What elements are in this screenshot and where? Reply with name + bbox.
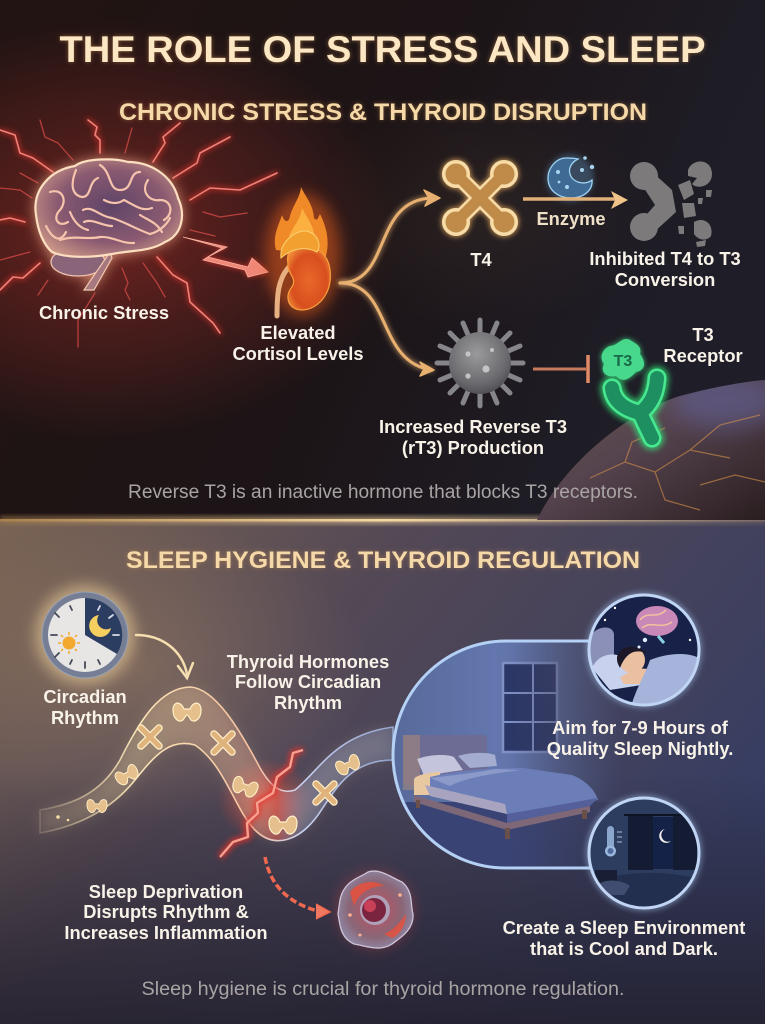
label: aim for 7-9 hours: Aim for 7-9 Hours of xyxy=(552,717,729,738)
label: create a sleep environment: that is Cool and Dark. xyxy=(530,938,718,959)
label: increased reverse T3 production: (rT3) Production xyxy=(402,437,544,458)
icon: circadian clock xyxy=(35,585,135,685)
label: sleep deprivation: Sleep Deprivation xyxy=(89,881,243,902)
arrows: cortisol branching to T4 and rT3 xyxy=(340,190,440,376)
icon: reverse T3 particle xyxy=(437,320,523,406)
label: enzyme: Enzyme xyxy=(536,208,606,229)
panel: chronic stress background xyxy=(0,0,765,520)
label: aim for 7-9 hours: Quality Sleep Nightly. xyxy=(547,738,733,759)
chart: circadian hormone wave ribbon xyxy=(40,687,393,842)
label: T3 receptor xyxy=(663,324,743,366)
icon: brain xyxy=(35,159,182,290)
label: thyroid hormones follow circadian rhythm: Follow Circadian xyxy=(235,671,381,692)
icon: inflamed cell xyxy=(337,871,413,948)
note: sleep hygiene: Sleep hygiene is crucial for thyroid hormone regulation. xyxy=(142,979,624,1000)
icon: sleeping person with brain xyxy=(586,592,702,710)
planet surface xyxy=(537,372,765,520)
label: sleep deprivation: Increases Inflammation xyxy=(64,922,268,943)
label: circadian rhythm: Rhythm xyxy=(51,707,119,728)
label: chronic stress: Chronic Stress xyxy=(39,302,169,323)
label: sleep deprivation xyxy=(64,881,268,943)
label: elevated cortisol levels xyxy=(232,322,364,364)
label: elevated cortisol levels: Elevated xyxy=(260,322,336,343)
arrow: enzyme conversion xyxy=(523,191,628,209)
heading: chronic stress and thyroid disruption: CHRONIC STRESS & THYROID DISRUPTION xyxy=(119,99,647,126)
icon: fragmented T4 molecule xyxy=(630,161,712,247)
arrow: clock to wave xyxy=(136,635,193,678)
arrow: rT3 blocks receptor xyxy=(533,355,588,383)
illustration: bedroom xyxy=(392,640,607,870)
label: elevated cortisol levels: Cortisol Levels xyxy=(232,343,364,364)
divider line xyxy=(0,516,765,524)
label: increased reverse T3 production xyxy=(379,416,567,458)
label: circadian rhythm: Circadian xyxy=(43,686,127,707)
label: thyroid hormones follow circadian rhythm: Thyroid Hormones xyxy=(227,651,389,672)
icon: kidney with flame xyxy=(265,187,341,317)
label: increased reverse T3 production: Increased Reverse T3 xyxy=(379,416,567,437)
label: T3 receptor: Receptor xyxy=(663,345,743,366)
heading: chronic stress and thyroid disruption: CHRONIC STRESS & THYROID DISRUPTION xyxy=(119,99,647,126)
label: aim for 7-9 hours xyxy=(547,717,733,759)
label: circadian rhythm xyxy=(43,686,127,728)
label: create a sleep environment: Create a Sleep Environment xyxy=(503,917,745,938)
label: T4: T4 xyxy=(470,249,492,270)
label: inhibited T4 to T3 conversion xyxy=(589,248,741,290)
panel: sleep hygiene background xyxy=(0,520,765,1024)
note: reverse T3: Reverse T3 is an inactive hormone that blocks T3 receptors. xyxy=(128,482,638,503)
heading: sleep hygiene and thyroid regulation: SLEEP HYGIENE & THYROID REGULATION xyxy=(126,547,640,574)
label: inhibited T4 to T3 conversion: Inhibited T4 to T3 xyxy=(589,248,741,269)
label: thyroid hormones follow circadian rhythm: Rhythm xyxy=(274,692,342,713)
icon: red disruption lightning xyxy=(220,750,303,857)
icon: enzyme xyxy=(546,154,594,202)
title: THE ROLE OF STRESS AND SLEEP xyxy=(60,29,706,70)
arrow: brain to kidney xyxy=(183,237,268,277)
icon: T4 molecule xyxy=(442,160,518,236)
label: inhibited T4 to T3 conversion: Conversion xyxy=(615,269,715,290)
heading: sleep hygiene and thyroid regulation: SLEEP HYGIENE & THYROID REGULATION xyxy=(126,547,640,574)
label: sleep deprivation: Disrupts Rhythm & xyxy=(83,901,249,922)
icon: T3 receptor xyxy=(602,339,657,438)
arrow: disruption to inflammation xyxy=(265,857,330,919)
icon: lightning around brain xyxy=(0,120,277,347)
title: THE ROLE OF STRESS AND SLEEP xyxy=(60,29,706,70)
label: thyroid hormones follow circadian rhythm xyxy=(227,651,389,713)
label: T3 receptor: T3 xyxy=(692,324,714,345)
label: create a sleep environment xyxy=(503,917,745,959)
icon: cool dark room xyxy=(586,795,702,912)
icon: T3 receptor: T3 xyxy=(614,353,632,370)
